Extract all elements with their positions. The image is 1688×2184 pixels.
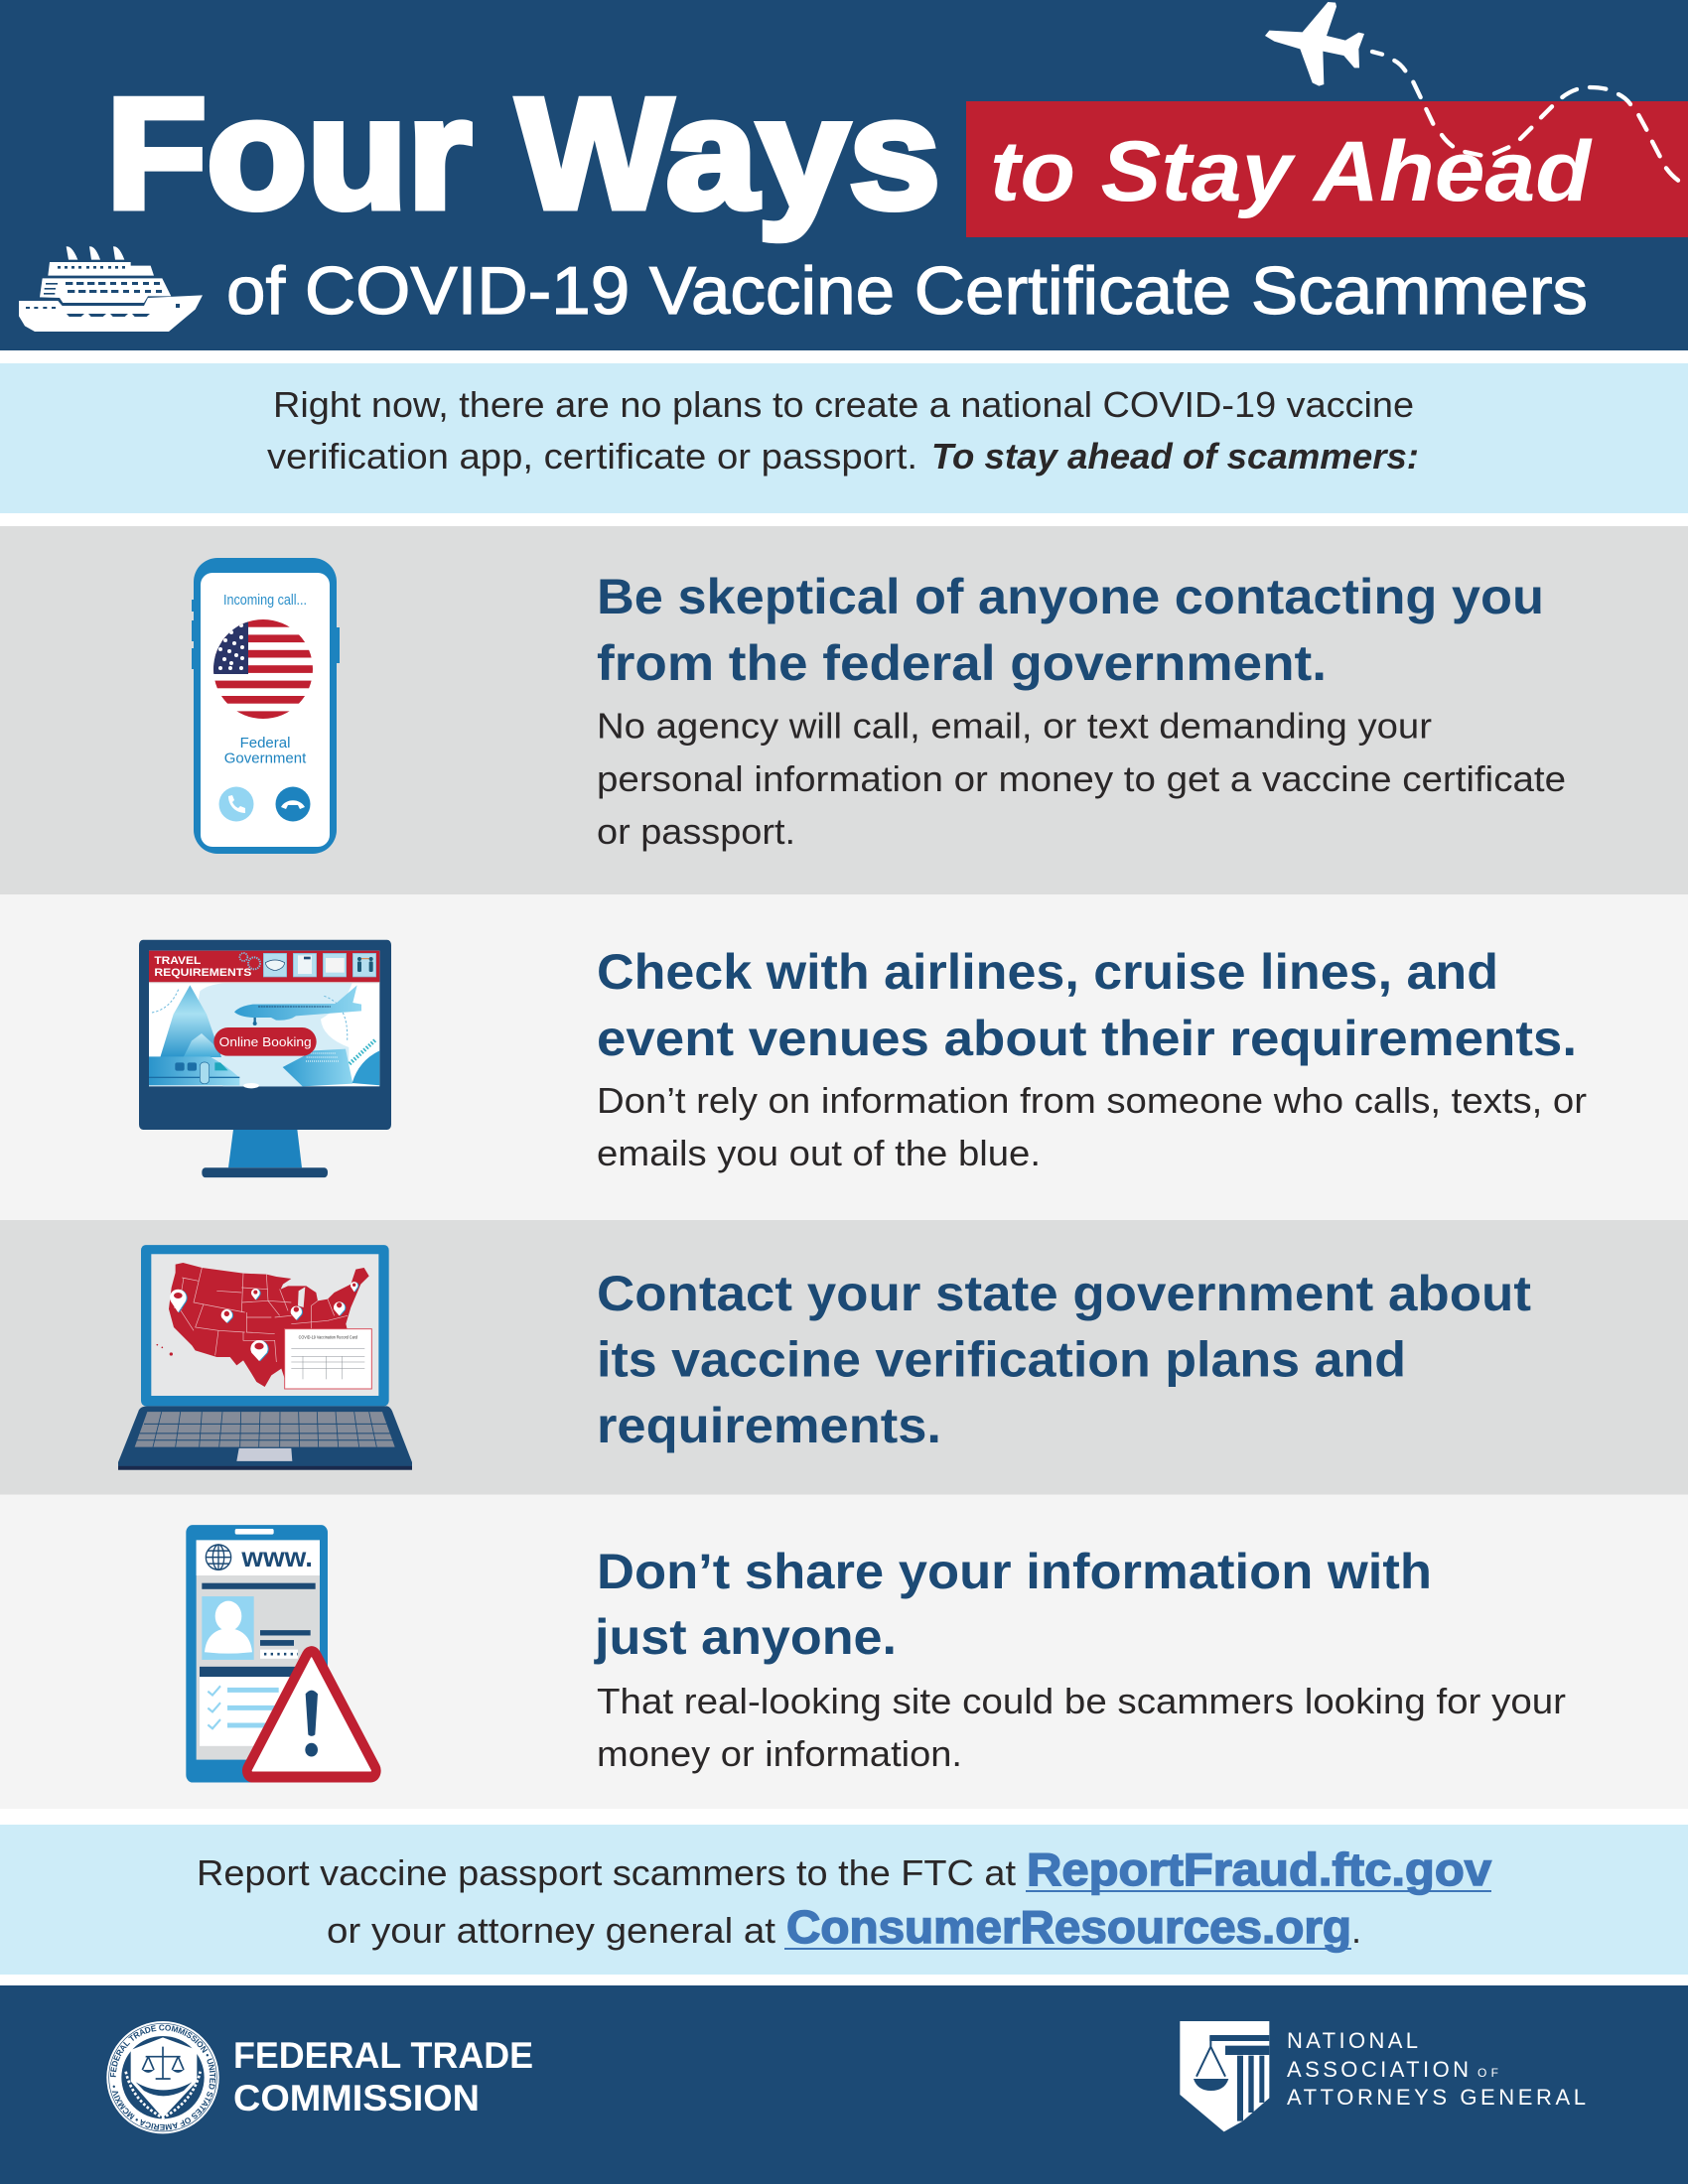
panel: be skeptical	[0, 526, 1688, 894]
heading: Contact your state government about	[597, 1266, 1531, 1321]
icon: airplane with dashed flight path	[1265, 2, 1678, 181]
intro panel	[0, 363, 1688, 513]
FTC wordmark: COMMISSION	[233, 2078, 480, 2118]
red banner: to Stay Ahead	[966, 101, 1688, 237]
panel: check with airlines	[0, 894, 1688, 1220]
heading: Check with airlines, cruise lines, and	[597, 944, 1498, 1000]
heading: its vaccine verification plans and	[597, 1332, 1406, 1388]
heading	[594, 1544, 1432, 1665]
icon: laptop with US map	[118, 1245, 412, 1470]
icon: phone with incoming call	[192, 558, 340, 854]
icon: desktop monitor with travel booking site: TRAVEL	[154, 955, 201, 967]
link: ConsumerResources.org: ConsumerResources.org	[786, 1901, 1351, 1953]
icon: tablet with website and warning triangle	[186, 1525, 370, 1783]
heading	[597, 1266, 1531, 1453]
body text: emails you out of the blue.	[597, 1133, 1041, 1173]
body text: personal information or money to get a vaccine certificate	[597, 758, 1566, 799]
heading: requirements.	[597, 1398, 941, 1453]
header banner	[0, 0, 1688, 350]
logo: FTC seal: FEDERAL TRADE COMMISSION • UNITED STATES OF AMERICA • MCMXIV •	[109, 2025, 216, 2130]
subtitle: of COVID-19 Vaccine Certificate Scammers	[226, 253, 1588, 329]
title: Four Ways: Four Ways	[106, 67, 940, 241]
panel: don't share information	[0, 1495, 1688, 1809]
intro line 1: Right now, there are no plans to create a national COVID-19 vaccine	[273, 384, 1414, 425]
body text: That real-looking site could be scammers looking for your	[597, 1681, 1566, 1721]
heading: Don’t share your information with	[597, 1544, 1432, 1599]
link: ReportFraud.ftc.gov: ReportFraud.ftc.gov	[1027, 1843, 1491, 1895]
report line 2: or your attorney general at	[327, 1910, 775, 1951]
icon: phone with incoming call: Incoming call...	[223, 593, 307, 609]
body text: or passport.	[597, 811, 795, 852]
body text: Don’t rely on information from someone who calls, texts, or	[597, 1080, 1587, 1121]
icon: cruise ship	[19, 246, 203, 332]
panel: contact state government	[0, 1220, 1688, 1495]
FTC wordmark	[233, 2035, 533, 2118]
intro emphasis: To stay ahead of scammers:	[931, 436, 1419, 477]
heading: from the federal government.	[597, 635, 1327, 691]
icon: laptop with US map: COVID-19 Vaccination Record Card	[299, 1334, 357, 1339]
period: .	[1351, 1910, 1361, 1951]
NAAG wordmark: ATTORNEYS GENERAL	[1287, 2085, 1586, 2110]
intro line 2: verification app, certificate or passport.	[267, 436, 917, 477]
body text: No agency will call, email, or text demanding your	[597, 705, 1432, 747]
icon: phone with incoming call: Government	[224, 751, 307, 766]
heading	[597, 569, 1544, 691]
body text	[597, 705, 1566, 852]
NAAG wordmark: NATIONAL	[1287, 2028, 1418, 2053]
icon: desktop monitor with travel booking site	[139, 940, 391, 1177]
heading	[597, 944, 1577, 1066]
body text	[597, 1681, 1566, 1774]
panel: report scammers	[0, 1825, 1688, 1975]
icon: desktop monitor with travel booking site: Online Booking	[219, 1034, 312, 1049]
logo: NAAG shield	[1180, 2021, 1269, 2131]
heading: event venues about their requirements.	[597, 1011, 1577, 1066]
footer	[0, 1985, 1688, 2184]
NAAG wordmark: OF	[1477, 2066, 1498, 2080]
NAAG wordmark: ASSOCIATION	[1287, 2057, 1469, 2082]
icon: desktop monitor with travel booking site: REQUIREMENTS	[154, 967, 252, 979]
heading: Be skeptical of anyone contacting you	[597, 569, 1544, 624]
body text: money or information.	[597, 1733, 962, 1774]
icon: tablet with website and warning triangle: www.	[240, 1544, 313, 1573]
report line 1: Report vaccine passport scammers to the FTC at	[197, 1852, 1016, 1893]
NAAG wordmark	[1287, 2028, 1586, 2110]
FTC wordmark: FEDERAL TRADE	[233, 2035, 533, 2076]
red banner: to Stay Ahead: to Stay Ahead	[990, 124, 1593, 219]
icon: phone with incoming call: Federal	[240, 735, 290, 751]
heading: just anyone.	[594, 1609, 897, 1665]
body text	[597, 1080, 1587, 1173]
